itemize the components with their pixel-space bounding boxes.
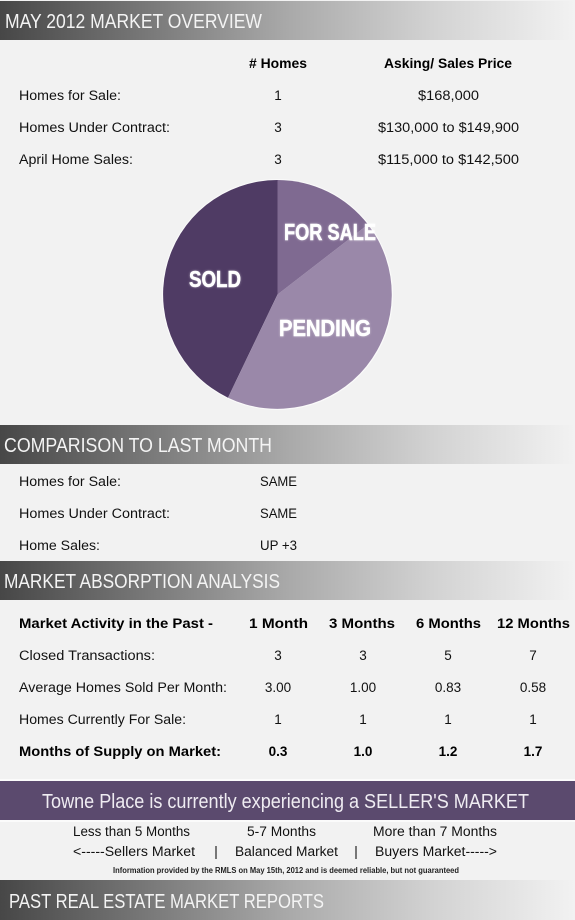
table: comparison to last month: Home Sales: [19,538,100,553]
table: market absorption: 12 Months [497,616,570,631]
table: market absorption: 1 [359,712,367,727]
table: market absorption: 1.7 [524,744,542,759]
table: market absorption: Closed Transactions: [19,648,155,663]
header: market absorption analysis [0,561,575,600]
source note: Information provided by the RMLS on May 15th, 2012 and is deemed reliable, but not guaranteed [113,866,459,875]
table: market absorption: 3 Months [329,616,395,631]
header: comparison to last month [0,425,575,464]
table: comparison to last month: SAME [260,506,297,521]
table: market overview: Homes Under Contract: [19,120,170,135]
table: market absorption: 1 [274,712,282,727]
header: market absorption analysis: MARKET ABSORPTION ANALYSIS [4,571,280,593]
table: comparison to last month: Homes Under Contract: [19,506,170,521]
label: sold: SOLD [189,266,241,292]
slice: sold [163,180,278,398]
header: past real estate market reports: PAST REAL ESTATE MARKET REPORTS [9,891,324,913]
table: market absorption: 3 [274,648,282,663]
table: market absorption: 7 [529,648,537,663]
table: market overview: $168,000 [418,88,479,103]
legend: market types by months of supply: Less than 5 Months [73,824,190,839]
table: comparison to last month [19,474,297,553]
table: market absorption: Average Homes Sold Per Month: [19,680,227,695]
table: market absorption: Homes Currently For Sale: [19,712,186,727]
legend: market types by months of supply: More than 7 Months [373,824,497,839]
table: market absorption [19,616,570,759]
table: market absorption: 1.0 [354,744,372,759]
table: market overview: 3 [274,120,282,135]
legend: market types by months of supply: Buyers Market-----> [375,844,497,859]
table: market overview: Asking/ Sales Price [384,56,512,71]
banner: seller's market: Towne Place is currently experiencing a SELLER'S MARKET [42,791,529,813]
header: May 2012 market overview: MAY 2012 MARKET OVERVIEW [5,11,262,33]
table: comparison to last month: Homes for Sale: [19,474,121,489]
label: pending: PENDING [279,315,371,341]
legend: market types by months of supply: | [214,844,218,859]
legend: market types by months of supply: <-----Sellers Market [73,844,195,859]
header: past real estate market reports [0,880,575,920]
table: market absorption: 3 [359,648,367,663]
table: market overview: $130,000 to $149,900 [378,120,519,135]
table: market absorption: 6 Months [416,616,481,631]
table: comparison to last month: SAME [260,474,297,489]
header: May 2012 market overview [0,1,575,40]
table: market absorption: 5 [444,648,452,663]
legend: market types by months of supply: 5-7 Months [247,824,316,839]
table: market overview: April Home Sales: [19,152,133,167]
table: market absorption: 1.2 [439,744,457,759]
table: market absorption: 0.83 [435,680,461,695]
table: market overview: Homes for Sale: [19,88,121,103]
table: market absorption: 0.58 [520,680,546,695]
legend: market types by months of supply: | [354,844,358,859]
legend: market types by months of supply: Balanced Market [235,844,338,859]
slice: for sale [278,180,368,294]
table: market absorption: Market Activity in the Past - [19,616,213,631]
table: market overview: $115,000 to $142,500 [378,152,519,167]
table: market absorption: 0.3 [269,744,288,759]
pie chart: for sale, pending, sold [162,179,393,410]
table: market absorption: 1 [529,712,537,727]
table: market absorption: Months of Supply on Market: [19,744,221,759]
slice: pending [228,224,392,409]
table: market absorption: 1.00 [350,680,376,695]
table: market absorption: 1 [444,712,452,727]
header: comparison to last month: COMPARISON TO LAST MONTH [4,435,272,457]
table: market absorption: 1 Month [249,616,308,631]
table: market overview [19,56,519,167]
label: for sale: FOR SALE [284,219,376,245]
table: market overview: 1 [274,88,282,103]
table: market overview: # Homes [249,56,307,71]
banner: seller's market [0,779,575,822]
table: comparison to last month: UP +3 [260,538,297,553]
table: market absorption: 3.00 [265,680,291,695]
legend: market types by months of supply [73,824,497,859]
table: market overview: 3 [274,152,282,167]
